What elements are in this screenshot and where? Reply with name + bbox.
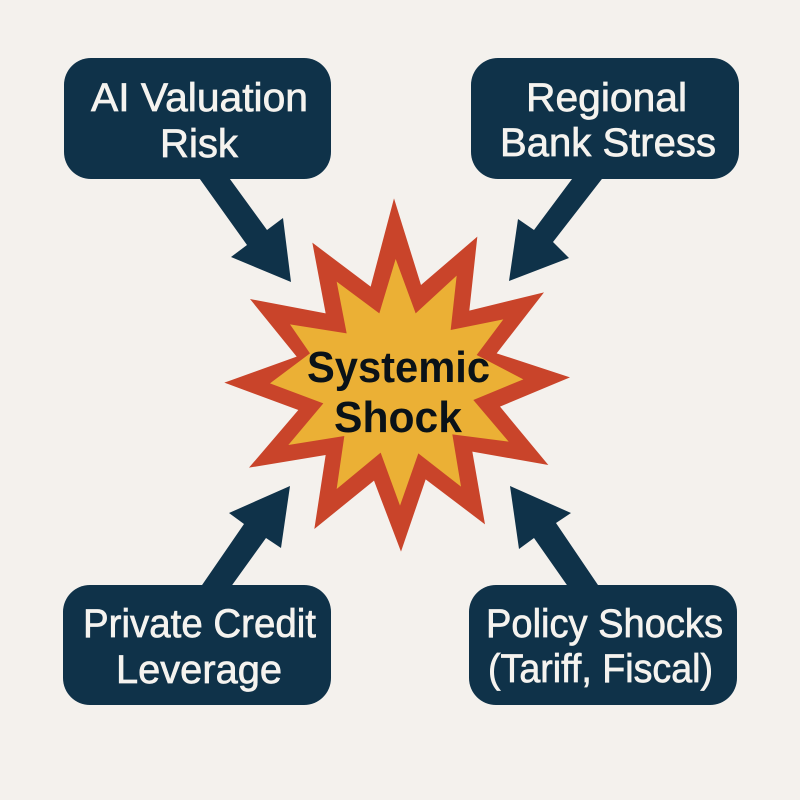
arrow: Private Credit Leverage to center [200, 486, 290, 588]
panel: Policy Shocks (Tariff, Fiscal): (Tariff, Fiscal) [488, 647, 713, 691]
panel: AI Valuation Risk [64, 58, 331, 179]
burst label: Systemic [307, 343, 490, 392]
panel: Regional Bank Stress [471, 58, 739, 179]
panel: Policy Shocks (Tariff, Fiscal) [469, 585, 737, 705]
panel: Policy Shocks (Tariff, Fiscal): Policy Shocks [486, 602, 723, 646]
burst inner star [270, 259, 523, 506]
arrow: Policy Shocks to center [510, 486, 600, 588]
burst label: Shock [334, 393, 463, 442]
panel: Private Credit Leverage: Private Credit [83, 602, 316, 646]
arrow: AI Valuation Risk to center [197, 175, 291, 282]
panel: AI Valuation Risk: Risk [160, 122, 239, 166]
panel: Regional Bank Stress: Regional [526, 76, 687, 120]
panel: Regional Bank Stress: Bank Stress [500, 121, 716, 165]
burst label [307, 343, 490, 442]
arrow: Regional Bank Stress to center [509, 175, 605, 281]
panel: Private Credit Leverage: Leverage [116, 648, 282, 692]
burst outer star [224, 198, 570, 552]
panel: Private Credit Leverage [63, 585, 331, 705]
panel: AI Valuation Risk: AI Valuation [91, 76, 308, 120]
central burst: Systemic Shock [224, 198, 570, 552]
